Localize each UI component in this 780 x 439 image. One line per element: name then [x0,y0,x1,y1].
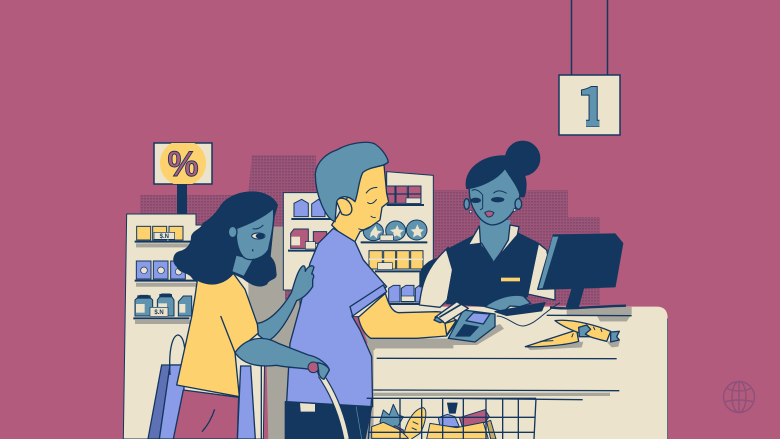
neck and face [332,165,389,246]
cashier [419,141,626,347]
shirt [287,228,387,407]
halftone store backdrop [140,155,600,305]
arm [358,293,457,338]
groceries [380,404,403,430]
hanging sign: number 1 [559,0,620,144]
blue packs [389,285,423,302]
hair [174,192,277,286]
blue boxes [136,261,185,279]
woman customer [173,192,277,439]
woman customer's bag [148,335,255,439]
cashier hair back [466,156,526,197]
discount sign with percent: % [167,145,199,184]
left shelf unit: $.N [154,310,164,316]
hair [315,142,388,222]
hand on keyboard [485,295,531,312]
checkout counter [365,307,668,439]
shadow on counter beside man [360,320,377,350]
star tins [363,220,427,241]
skirt [173,390,239,439]
neck [232,255,253,277]
left shelf unit [123,214,267,439]
shopping cart with groceries [367,398,536,439]
carrots [525,330,579,347]
cart wire grid [367,398,536,439]
left shelf unit: $.N [160,234,169,240]
woman's rear arm and hand [257,266,314,342]
yellow boxes [137,226,183,240]
trousers [285,402,372,439]
cashier chair back [420,258,438,287]
sleeve band [350,285,387,316]
face [236,208,274,260]
neck and collar [480,220,511,262]
vest [447,233,538,307]
payment card [435,302,468,323]
man customer [285,142,468,439]
middle shelf unit [283,172,433,317]
cashier left sleeve [419,247,453,307]
yellow packs [369,251,423,269]
cashier face [469,168,520,225]
card terminal [448,310,495,342]
discount sign with percent [154,140,212,216]
gray halftone between shelves [248,227,300,439]
cable [497,303,560,326]
ear [337,198,352,215]
monitor [567,274,587,307]
shirt [177,273,260,397]
cashier right sleeve [527,243,555,300]
teal jars [135,294,192,316]
hanging sign: number 1: 1 [575,63,609,144]
red boxes [385,186,421,203]
bun [506,141,540,175]
woman's front arm, walking cane and hand [235,338,347,439]
logo: globe [724,382,754,412]
